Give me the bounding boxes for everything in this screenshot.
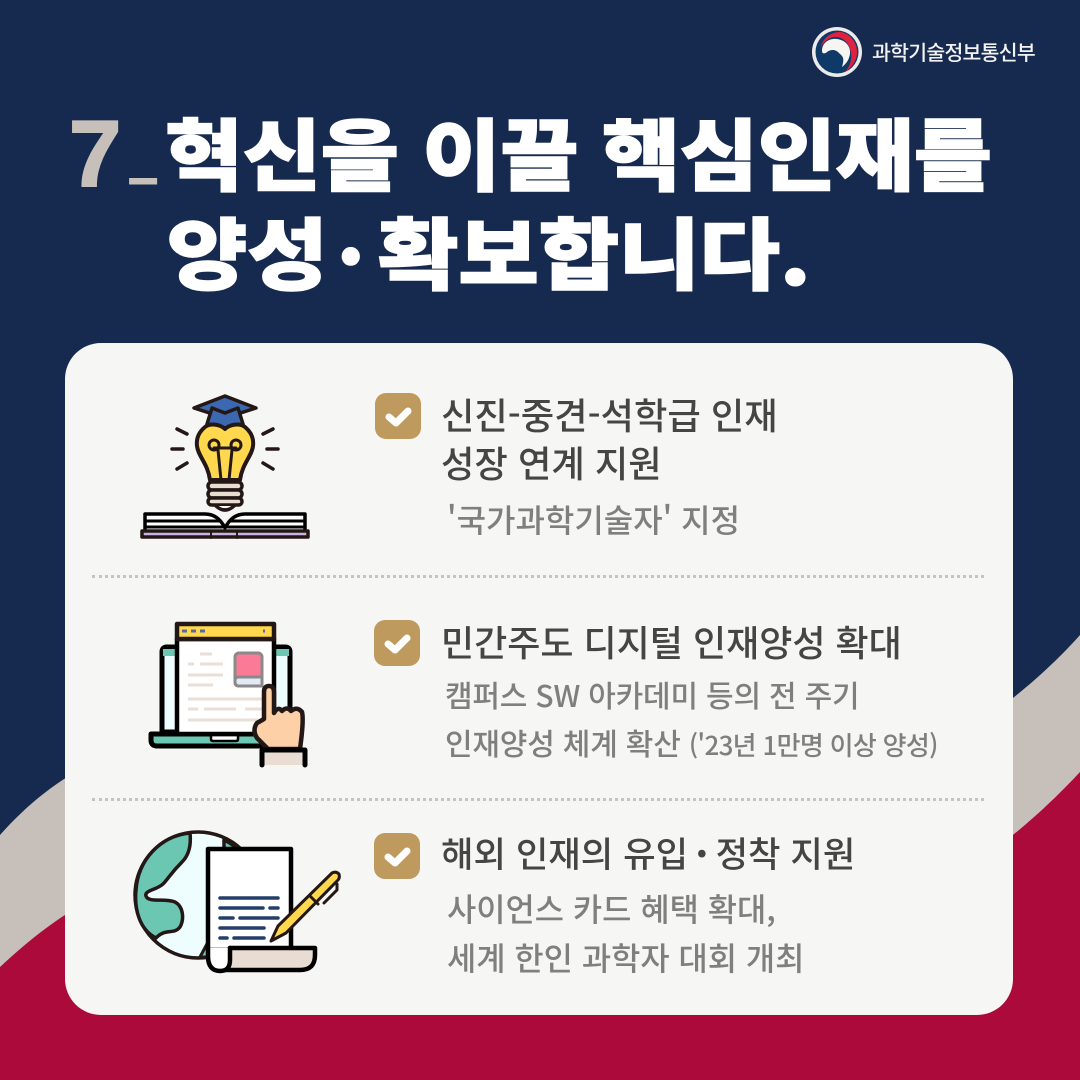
item 1 heading — [441, 388, 778, 488]
item 3 detail — [447, 885, 804, 980]
title middle dot: · — [337, 197, 365, 309]
title line 1: 혁신을 이끌 핵심인재를 — [165, 95, 992, 207]
item 2 heading: 민간주도 디지털 인재양성 확대 — [441, 615, 902, 667]
icon: globe with document and pen — [133, 830, 341, 974]
item 2 detail: 인재양성 체계 확산 ('23년 1만명 이상 양성) — [445, 720, 938, 764]
item 3 heading: 해외 인재의 유입·정착 지원 — [441, 827, 855, 878]
item 2 check badge — [374, 620, 420, 666]
title — [165, 95, 992, 309]
logo emblem — [812, 27, 862, 77]
title number: 7 — [69, 101, 121, 206]
item 1 heading: 신진-중견-석학급 인재 — [441, 388, 778, 440]
item 1 heading: 성장 연계 지원 — [441, 436, 662, 488]
item 1 check badge — [375, 393, 421, 439]
title number underscore: _ — [132, 142, 154, 186]
title line 2 right: 확보합니다. — [378, 194, 811, 306]
item 1 detail: '국가과학기술자' 지정 — [447, 496, 740, 542]
item 2 detail: 캠퍼스 SW 아카데미 등의 전 주기 — [445, 672, 859, 716]
panel: main card — [65, 343, 1013, 1015]
item 3 detail: 사이언스 카드 혜택 확대, — [447, 885, 776, 931]
item 3 detail: 세계 한인 과학자 대회 개최 — [447, 934, 804, 980]
title line 2 left: 양성 — [167, 194, 328, 306]
icon: laptop with hand and book — [148, 622, 308, 768]
government logo and ministry name — [812, 27, 1035, 77]
ministry name: 과학기술정보통신부 — [872, 36, 1035, 66]
item 2 detail — [445, 672, 938, 764]
icon: light bulb with graduation cap on book — [140, 394, 310, 539]
item 3 check badge — [374, 833, 420, 879]
